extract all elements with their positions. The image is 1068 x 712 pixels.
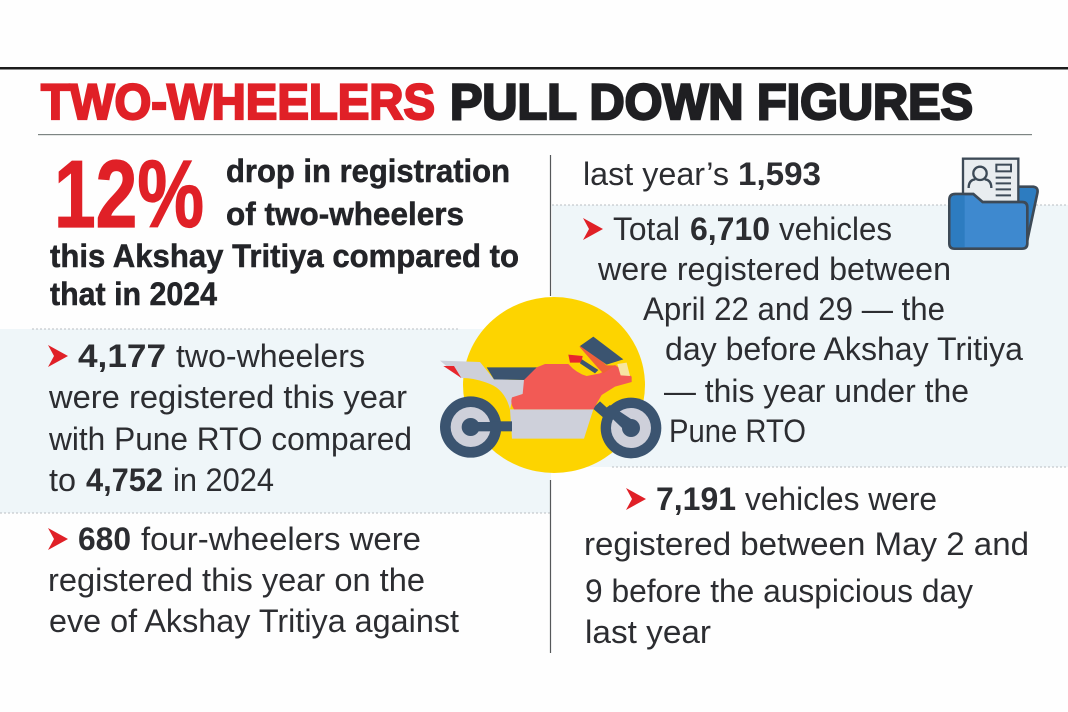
bullet: 7,191 vehicles: vehicles were — [745, 481, 937, 517]
bullet: 4,177 two-wheelers: with Pune RTO compared — [48, 421, 412, 457]
lead text: of two-wheelers — [226, 196, 464, 232]
bullet: total 6,710 vehicles: were registered between — [597, 251, 951, 287]
bullet: total 6,710 vehicles: vehicles — [779, 211, 892, 247]
bullet: total 6,710 vehicles: Pune RTO — [669, 413, 806, 449]
bullet: 4,177 two-wheelers: in 2024 — [173, 462, 274, 498]
bullet: 4,177 two-wheelers: to — [49, 462, 76, 498]
lead text — [50, 153, 519, 312]
bullet: total 6,710 vehicles: — this year under the — [664, 373, 969, 409]
bullet: total 6,710 vehicles: Total — [613, 211, 680, 247]
title — [41, 74, 973, 130]
bullet: 680 four-wheelers: eve of Akshay Tritiya against — [49, 603, 459, 639]
bullet: 680 four-wheelers — [48, 156, 821, 639]
bullet: 680 four-wheelers: 680 — [78, 521, 131, 557]
bullet: 4,177 two-wheelers: were registered this year — [48, 379, 407, 415]
icon: red arrow — [48, 345, 68, 367]
title: TWO-WHEELERS — [41, 74, 435, 130]
bullet: total 6,710 vehicles: April 22 and 29 — the — [643, 291, 945, 327]
bullet: 7,191 vehicles: last year — [585, 614, 711, 650]
headline stat: 12%: 12% — [54, 141, 204, 248]
bullet: total 6,710 vehicles — [583, 211, 1023, 449]
icon: red arrow — [583, 218, 603, 240]
bullet: total 6,710 vehicles: 6,710 — [690, 211, 770, 247]
bullet: 680 four-wheelers: last year’s — [583, 156, 729, 192]
bullet: 4,177 two-wheelers: 4,752 — [86, 462, 163, 498]
icon: motorcycle on yellow circle — [440, 297, 661, 473]
bullet: 680 four-wheelers: four-wheelers were — [141, 521, 421, 557]
lead text: this Akshay Tritiya compared to — [50, 238, 519, 274]
icon: document folder — [949, 159, 1038, 249]
title: PULL DOWN FIGURES — [450, 74, 973, 130]
bullet: 4,177 two-wheelers: two-wheelers — [176, 338, 365, 374]
icon: red arrow — [48, 528, 68, 550]
bullet: 7,191 vehicles: registered between May 2 and — [584, 526, 1029, 562]
bullet: 7,191 vehicles — [584, 481, 1029, 650]
lead text: that in 2024 — [50, 276, 217, 312]
bullet: 680 four-wheelers: registered this year on the — [48, 562, 425, 598]
bullet: 4,177 two-wheelers: 4,177 — [78, 338, 166, 374]
lead text: drop in registration — [226, 153, 510, 189]
bullet: 4,177 two-wheelers — [48, 338, 412, 498]
bullet: 680 four-wheelers: 1,593 — [738, 156, 821, 192]
bullet: total 6,710 vehicles: day before Akshay Tritiya — [665, 331, 1023, 367]
icon: red arrow — [626, 488, 646, 510]
panel: left shaded band — [0, 329, 551, 513]
bullet: 7,191 vehicles: 9 before the auspicious day — [585, 573, 973, 609]
bullet: 7,191 vehicles: 7,191 — [656, 481, 736, 517]
panel: right shaded band — [552, 205, 1068, 467]
